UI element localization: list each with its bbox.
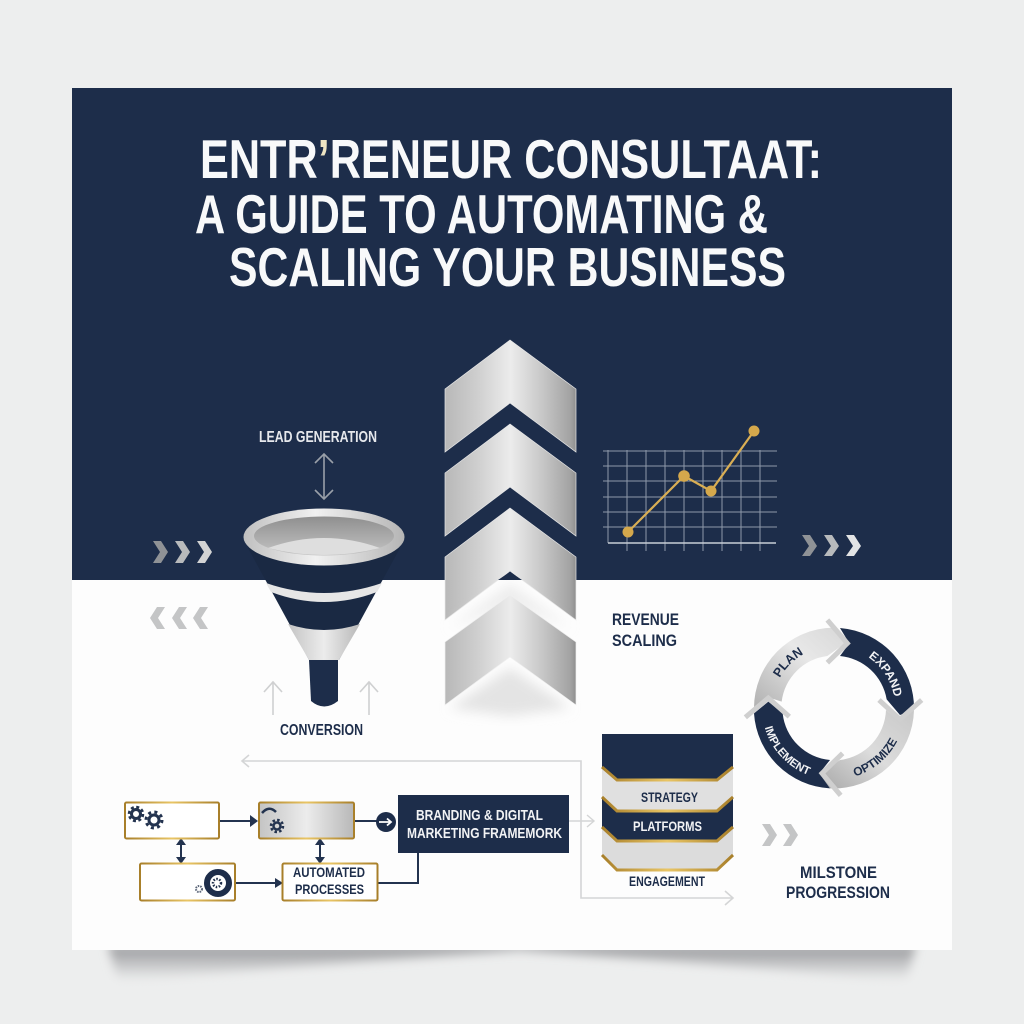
layer: bottom silver	[602, 827, 733, 870]
icon: wheel	[196, 872, 229, 894]
title: ENTR’RENEUR CONSULTAAT:	[200, 128, 822, 190]
icon: double arrow above funnel	[315, 454, 333, 499]
soft glow behind chevron 4	[450, 584, 570, 628]
chart axis	[608, 542, 776, 544]
chart points	[622, 426, 760, 538]
chart grid	[603, 450, 777, 551]
chevron stack: revenue scaling	[445, 340, 576, 716]
lead generation label: LEAD GENERATION	[259, 429, 377, 446]
chart line	[628, 431, 754, 532]
icon: chevrons right, upper left	[153, 541, 212, 563]
card drop shadow	[108, 945, 916, 982]
label: plan: PLAN	[772, 647, 803, 678]
process box 4: automated processes: AUTOMATED	[293, 864, 365, 880]
process box 3 with wheel	[140, 864, 235, 900]
branding framework box: BRANDING & DIGITAL	[416, 807, 543, 824]
chevron 4 shadow	[450, 668, 570, 716]
branding framework box	[398, 795, 569, 853]
funnel	[244, 508, 404, 706]
icon: chevrons right, chart side	[802, 535, 861, 556]
panel: navy upper header	[72, 88, 952, 580]
icon: right up arrow	[360, 682, 378, 715]
chevron 1	[445, 340, 576, 452]
chevron 2	[445, 424, 576, 536]
revenue scaling label	[612, 610, 679, 650]
platforms label: PLATFORMS	[633, 818, 702, 834]
milestone progression label: MILSTONE	[800, 863, 877, 882]
connectors between process boxes	[181, 821, 418, 883]
revenue scaling label: REVENUE	[612, 610, 679, 629]
layer: strategy silver	[602, 767, 733, 812]
process box 2 silver	[259, 802, 354, 838]
engagement label: ENGAGEMENT	[629, 873, 705, 889]
label: optimize: OPTIMIZE	[854, 738, 898, 776]
layer: top navy	[602, 734, 733, 780]
segment: plan	[754, 628, 845, 708]
funnel stem	[309, 660, 338, 706]
strategy label: STRATEGY	[641, 789, 698, 805]
icon: left up arrow	[264, 682, 282, 715]
icon: chevrons right, milestone	[762, 824, 798, 846]
gold edges	[602, 767, 733, 870]
label: implement: IMPLEMENT	[765, 726, 812, 774]
segment: expand	[840, 628, 914, 715]
icon: chevrons left	[150, 607, 208, 629]
funnel liquid surface	[268, 538, 380, 555]
chevron 4	[445, 595, 576, 705]
process box 4: automated processes: PROCESSES	[295, 881, 364, 897]
feedback line arrow top	[242, 755, 733, 905]
label: expand: EXPAND	[868, 651, 902, 696]
title: SCALING YOUR BUSINESS	[229, 236, 786, 298]
funnel light stripe	[266, 583, 382, 602]
panel: white lower card	[72, 570, 952, 950]
process box 1 with gears	[125, 802, 219, 838]
title: A GUIDE TO AUTOMATING &	[195, 183, 768, 245]
icon: arc and gear	[262, 809, 283, 832]
segment: implement	[754, 702, 830, 788]
milestone progression label	[786, 863, 890, 902]
conversion label: CONVERSION	[280, 722, 363, 739]
segment: optimize	[819, 710, 914, 788]
title	[195, 128, 822, 298]
process box 4: automated processes	[282, 864, 378, 900]
milestone progression label: PROGRESSION	[786, 883, 890, 902]
line chart	[603, 426, 777, 551]
navy notch of chevron 3	[498, 572, 522, 580]
funnel cone navy	[248, 548, 400, 660]
icon: circle arrow	[376, 812, 396, 832]
chevron 3	[445, 508, 576, 620]
branding framework box: MARKETING FRAMEMORK	[407, 825, 562, 842]
funnel rim	[244, 508, 404, 566]
funnel silver lower band	[288, 624, 360, 660]
layered stack	[602, 734, 733, 889]
layer: platforms navy	[602, 797, 733, 842]
circular cycle diagram	[744, 618, 924, 797]
arrow: framework to stack	[569, 815, 594, 827]
revenue scaling label: SCALING	[612, 631, 677, 650]
arrowhead accents	[745, 620, 922, 795]
connector arrowheads	[176, 815, 325, 888]
icon: gears	[129, 807, 162, 828]
funnel inner bowl	[254, 516, 394, 556]
